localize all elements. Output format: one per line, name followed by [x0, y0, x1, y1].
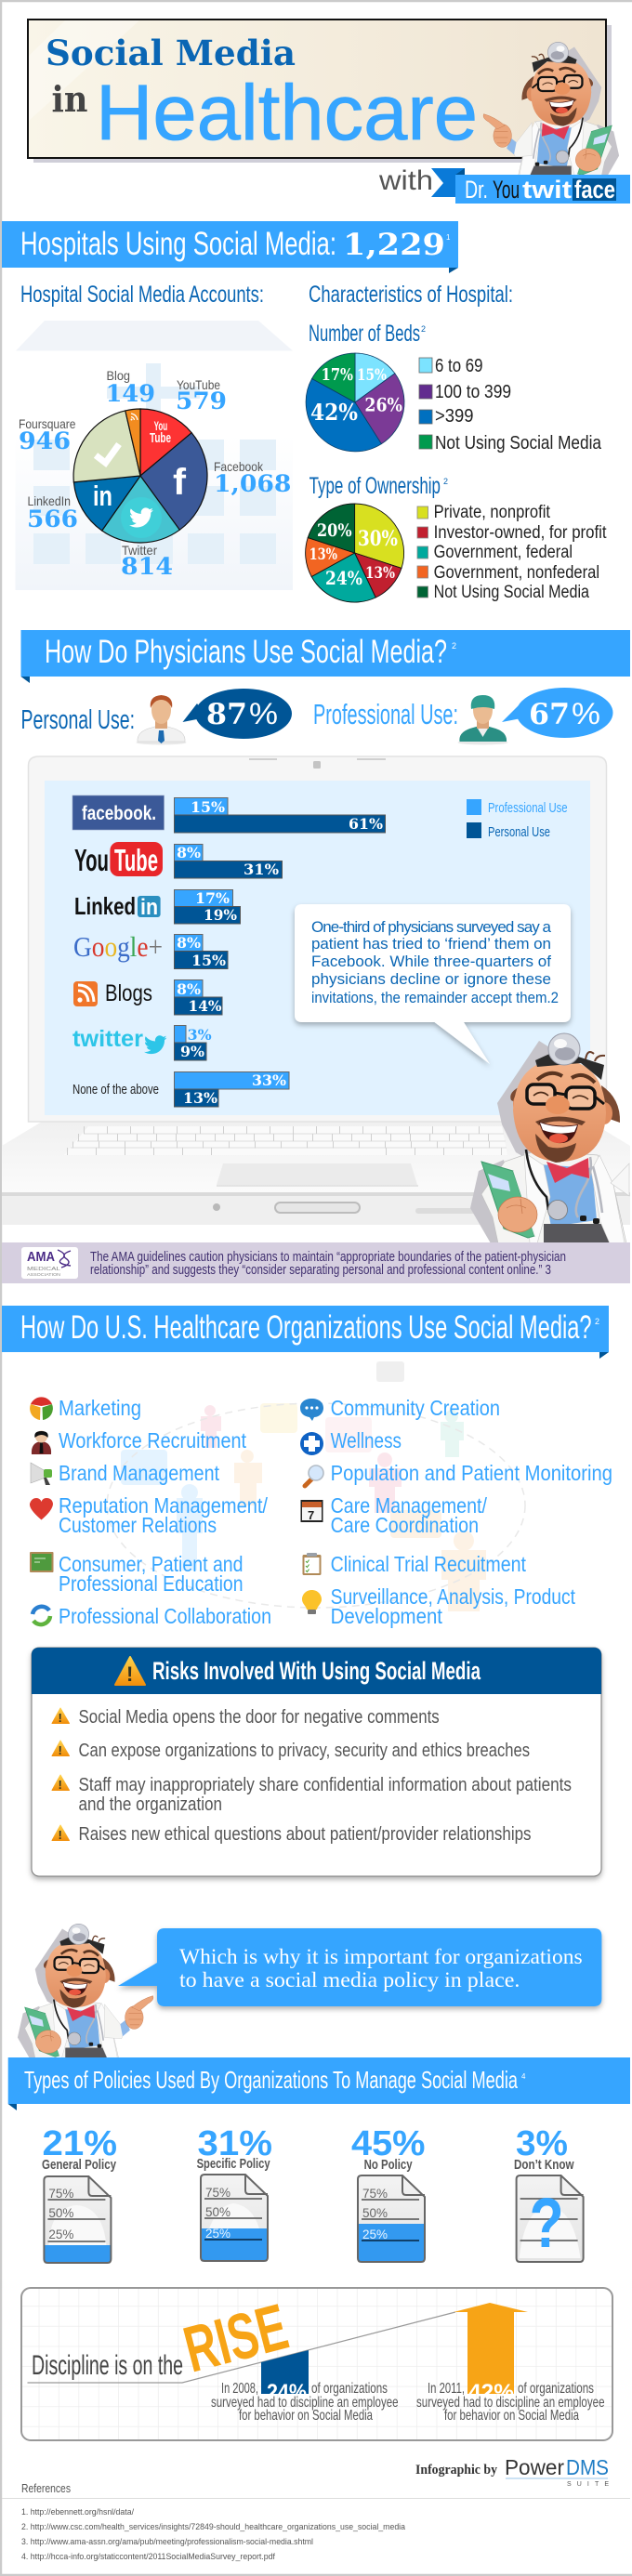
legend: type of ownership: [417, 503, 607, 602]
byline ribbon: face: [574, 176, 615, 204]
org use list: left column: Professional Collaboration: [59, 1604, 271, 1628]
org use list: left column: Workforce Recruitment: [59, 1428, 247, 1452]
banner: types of policies: [8, 2057, 630, 2110]
pie label: Facebook: 1,068: [214, 470, 292, 497]
heading: number of beds: Number of Beds: [309, 321, 420, 347]
banner: how do U.S. healthcare organizations use social media: 2: [595, 1317, 599, 1326]
document gauge: 31%: [201, 2175, 268, 2261]
org use list: right column: Surveillance, Analysis, Product: [331, 1584, 575, 1609]
text: 2008 stat: In 2008,: [221, 2381, 258, 2397]
doctor mascot: policy: [18, 1924, 153, 2060]
callout: friend requests: One-third of physicians surveyed say a: [311, 918, 552, 936]
heading: type of ownership: Type of Ownership: [309, 473, 441, 499]
professional use stat: %: [572, 697, 600, 730]
pie chart: type of ownership: 13%: [365, 564, 395, 583]
callout: friend requests: patient has tried to ‘friend’ them on: [311, 935, 551, 953]
row: facebook: 61%: [349, 815, 383, 833]
hospital building backdrop: [15, 321, 293, 590]
row: linkedin: 17%: [195, 889, 230, 907]
panel: risks: [32, 1648, 601, 1876]
row: youtube: You: [74, 843, 109, 877]
risk item 3: [52, 1775, 572, 1815]
pie label: Foursquare: Foursquare: [19, 416, 76, 431]
banner: hospitals using social media: Hospitals Using Social Media:: [20, 226, 336, 262]
banner: how do physicians use social media: [20, 630, 630, 683]
byline ribbon: You: [493, 176, 520, 204]
policy stat: no policy: 45%: [351, 2124, 426, 2163]
pie label: YouTube: 579: [176, 388, 227, 414]
bar chart: physician platform use: [72, 795, 385, 1107]
pie chart: type of ownership: 30%: [358, 527, 398, 551]
legend: type of ownership: Not Using Social Media: [434, 583, 589, 602]
personal use stat: 87: [206, 698, 247, 731]
icon: community bubble: [300, 1399, 323, 1421]
row: none of the above: None of the above: [72, 1082, 159, 1097]
pie label: Blog: Blog: [106, 368, 130, 383]
credit: infographic by PowerDMS: SUITE: [567, 2481, 609, 2488]
document gauge: 45%: 50%: [362, 2205, 388, 2220]
byline ribbon: with: [378, 165, 433, 196]
references: References: [21, 2481, 71, 2495]
banner: how do physicians use social media: 2: [452, 641, 456, 651]
row: google plus: [73, 930, 228, 969]
byline ribbon: Dr.: [465, 176, 488, 204]
trend line: [28, 2312, 455, 2383]
row: twitter: 3%: [188, 1026, 212, 1044]
org use list: right column: Care Coordination: [331, 1513, 479, 1537]
icon: collaboration arrows: [33, 1607, 50, 1624]
row: twitter: 9%: [180, 1043, 204, 1060]
legend: type of ownership: Investor-owned, for profit: [434, 523, 607, 543]
pie label: YouTube: YouTube: [177, 377, 220, 392]
pie chart: social media accounts: [73, 409, 207, 543]
word: RISE: RISE: [177, 2290, 295, 2386]
risk item 2: !: [58, 1743, 62, 1757]
text: 2011 stat: of organizations: [518, 2381, 594, 2397]
row: blogs: 14%: [188, 997, 221, 1015]
pie icons: in: [93, 480, 112, 512]
legend: type of ownership: Private, nonprofit: [434, 503, 551, 522]
row: blogs: 8%: [177, 980, 201, 998]
risk item 3: and the organization: [78, 1794, 222, 1815]
org use list: left column: Consumer, Patient and: [59, 1552, 244, 1576]
panel header: Risks Involved With Using Social Media: [152, 1657, 481, 1685]
row: google plus: Google+: [73, 930, 163, 963]
credit: infographic by PowerDMS: Infographic by: [415, 2463, 497, 2477]
pie label: Foursquare: [19, 416, 76, 454]
pie label: Foursquare: 946: [19, 427, 71, 454]
icon: marketing ball: [30, 1397, 53, 1420]
pie label: Twitter: Twitter: [122, 543, 157, 558]
text: 2008 stat: surveyed had to discipline an employee: [211, 2395, 399, 2411]
callout: friend requests: Facebook. While three-quarters of: [311, 953, 551, 970]
row: youtube: [74, 842, 283, 878]
icon: wellness plus: [300, 1432, 323, 1455]
bar: 2008: 24%: [267, 2380, 307, 2405]
document gauge: 21%: 50%: [48, 2205, 73, 2220]
pie chart: type of ownership: [306, 504, 404, 602]
document gauge: 21%: 75%: [48, 2186, 73, 2201]
references: 3. http://www.ama-assn.org/ama/pub/meeting/professionalism-social-media.shtml: [21, 2537, 313, 2547]
professional use stat: 67: [529, 698, 570, 731]
policy stat: specific: [197, 2124, 272, 2261]
title: Healthcare: Healthcare: [96, 69, 478, 156]
risk item 2: Can expose organizations to privacy, security and ethics breaches: [78, 1741, 530, 1761]
row: linkedin: in: [140, 895, 158, 920]
icon: light bulb: [302, 1590, 322, 1614]
callout: policy importance: to have a social media policy in place.: [179, 1968, 520, 1991]
row: blogs: Blogs: [105, 980, 152, 1006]
legend: number of beds: [419, 356, 602, 453]
row: linkedin: [74, 889, 240, 924]
legend: number of beds: >399: [435, 406, 474, 427]
callout: friend requests: [295, 904, 571, 1064]
document gauge: 21%: [44, 2176, 111, 2263]
row: twitter: [72, 1026, 212, 1060]
banner: how do U.S. healthcare organizations use social media: [2, 1306, 609, 1359]
org use list: right column: Development: [331, 1604, 443, 1628]
pie label: Twitter: [121, 543, 173, 580]
panel: discipline on the rise: [21, 2288, 612, 2440]
policy stat: specific: 31%: [197, 2124, 272, 2163]
byline ribbon: [378, 165, 630, 204]
icon: magnifier: [305, 1465, 323, 1486]
legend: type of ownership: Government, nonfederal: [434, 563, 599, 583]
AMA guideline strip: [2, 1242, 630, 1283]
professional use stat: Professional Use:: [313, 698, 458, 730]
icon: workforce person: [32, 1431, 51, 1454]
pie chart: number of beds: 17%: [322, 365, 353, 385]
org use list: left column: Professional Education: [59, 1571, 244, 1596]
banner: hospitals using social media: [2, 221, 458, 273]
org use list: right column: [331, 1396, 612, 1628]
bar chart legend: [467, 799, 568, 840]
heading: characteristics of hospital: Characteristics of Hospital:: [309, 282, 513, 308]
row: facebook: 15%: [191, 798, 225, 816]
pie chart: number of beds: 15%: [357, 366, 387, 385]
pie label: Blog: 149: [106, 380, 155, 407]
row: none of the above: 33%: [252, 1071, 286, 1089]
policy stat: general: General Policy: [42, 2157, 117, 2173]
document gauge: 45%: 75%: [362, 2186, 388, 2201]
pie label: Blog: [106, 368, 155, 407]
document gauge: 21%: 25%: [48, 2227, 73, 2241]
panel header: [32, 1648, 601, 1694]
pie icons: [93, 414, 187, 538]
legend: number of beds: 100 to 399: [435, 382, 511, 402]
icon: clipboard: [303, 1553, 322, 1575]
policy stat: general: 21%: [43, 2124, 117, 2163]
pie chart: number of beds: [306, 353, 404, 452]
org use list: left column: [59, 1396, 271, 1628]
pie chart: number of beds: 42%: [310, 399, 358, 426]
panel header: !: [126, 1663, 133, 1686]
policy stat: don't know: 3%: [516, 2124, 568, 2163]
credit: infographic by PowerDMS: Power: [505, 2455, 564, 2479]
document gauge: 31%: 75%: [205, 2185, 230, 2200]
risk item 3: !: [58, 1778, 62, 1792]
org use list: left column: Marketing: [59, 1396, 141, 1420]
pie chart: type of ownership: 13%: [309, 545, 337, 564]
bar: 2008: [261, 2350, 309, 2394]
references: [2, 2481, 630, 2562]
risk item 4: Raises new ethical questions about patient/provider relationships: [78, 1824, 532, 1845]
document gauge: 31%: 50%: [205, 2204, 230, 2219]
title: in: in: [52, 78, 87, 120]
row: linkedin: 19%: [204, 906, 237, 924]
org use list: left column: Brand Management: [59, 1461, 220, 1485]
pie label: Twitter: 814: [121, 553, 173, 580]
org use list: right column: Community Creation: [331, 1396, 500, 1420]
heading: discipline is on the: Discipline is on the: [32, 2350, 183, 2381]
policy stat: don't know: [514, 2124, 584, 2263]
pie chart: number of beds: 26%: [364, 394, 402, 416]
row: blogs: [73, 979, 222, 1015]
heading: number of beds: 2: [421, 324, 426, 334]
icon: physician: [136, 695, 186, 745]
document gauge: unknown: ?: [530, 2184, 564, 2263]
policy stat: specific: Specific Policy: [197, 2156, 270, 2172]
icon: megaphone: [31, 1463, 52, 1485]
bar chart legend: Personal Use: [488, 824, 550, 840]
row: linkedin: Linked: [74, 892, 136, 920]
banner: hospitals using social media: 1: [446, 233, 451, 242]
banner: types of policies: 4: [521, 2072, 526, 2081]
byline ribbon: twit: [522, 176, 572, 204]
row: twitter: twitter: [72, 1026, 143, 1052]
risk item 1: !: [58, 1711, 62, 1725]
policy stat: don't know: Don’t Know: [514, 2157, 574, 2173]
row: facebook: facebook.: [82, 803, 156, 824]
pie label: LinkedIn: 566: [27, 506, 78, 532]
policy stat: no policy: No Policy: [364, 2157, 413, 2173]
pie chart: type of ownership: 24%: [325, 567, 362, 589]
banner: hospitals using social media: 1,229: [343, 227, 445, 262]
row: google plus: 15%: [191, 952, 226, 969]
professional use stat: [313, 688, 613, 745]
arrow: 2011: 42%: [468, 2380, 514, 2405]
heading: number of beds: [309, 321, 426, 347]
heading: hospital social media accounts: Hospital Social Media Accounts:: [20, 282, 264, 308]
pie label: LinkedIn: LinkedIn: [28, 493, 71, 508]
text: 2008 stat: for behavior on Social Media: [239, 2408, 373, 2424]
pie label: Facebook: Facebook: [214, 459, 264, 474]
document gauge: 45%: 25%: [362, 2227, 388, 2241]
org use list: right column: Clinical Trial Recuitment: [331, 1552, 527, 1576]
AMA logo: AMA: [27, 1249, 55, 1265]
banner: how do physicians use social media: How Do Physicians Use Social Media?: [45, 634, 447, 670]
row: youtube: Tube: [114, 843, 158, 877]
AMA logo: MEDICAL: [27, 1267, 60, 1272]
document gauge: unknown: [517, 2175, 584, 2263]
callout: policy importance: [118, 1928, 601, 2006]
credit: infographic by PowerDMS: [415, 2455, 609, 2488]
heading: type of ownership: 2: [443, 477, 448, 486]
icon: chalkboard: [30, 1552, 54, 1572]
row: none of the above: [72, 1071, 289, 1107]
org use list: right column: Wellness: [331, 1428, 402, 1452]
text: 2011 stat: for behavior on Social Media: [444, 2408, 579, 2424]
references: 4. http://hcca-info.org/staticcontent/2011SocialMediaSurvey_report.pdf: [21, 2552, 275, 2562]
org use list: right column: Care Management/: [331, 1493, 488, 1518]
pie chart: type of ownership: 20%: [317, 520, 352, 541]
credit: infographic by PowerDMS: DMS: [566, 2455, 609, 2479]
legend: type of ownership: Government, federal: [434, 543, 573, 562]
pie label: YouTube: [176, 377, 227, 414]
references: 2. http://www.csc.com/health_services/insights/72849-should_healthcare_organizations_use_social_media: [21, 2522, 406, 2532]
text: 2008 stat: of organizations: [311, 2381, 388, 2397]
document gauge: 45%: [358, 2175, 425, 2262]
personal use stat: %: [249, 697, 278, 730]
icon: heart: [30, 1498, 53, 1520]
doctor mascot: laptop: [470, 1033, 629, 1243]
row: youtube: 31%: [244, 861, 279, 878]
row: none of the above: 13%: [183, 1089, 217, 1107]
title panel: [28, 20, 612, 163]
icon: surgeon: [457, 695, 507, 745]
doctor mascot: header: [483, 42, 619, 178]
row: youtube: 8%: [177, 844, 201, 861]
legend: number of beds: 6 to 69: [435, 356, 483, 376]
arrow: 2011: [454, 2303, 528, 2394]
personal use stat: [20, 689, 292, 745]
policy stat: general: [42, 2124, 117, 2263]
pie icons: You: [154, 418, 167, 433]
policy stat: no policy: [351, 2124, 426, 2262]
row: google plus: 8%: [177, 934, 201, 952]
pie label: Facebook: [214, 459, 292, 497]
text: 2008 stat: [211, 2381, 399, 2424]
callout: friend requests: invitations, the remainder accept them.2: [311, 989, 559, 1006]
document gauge: 31%: 25%: [205, 2226, 230, 2241]
callout: policy importance: Which is why it is important for organizations: [179, 1945, 583, 1968]
legend: number of beds: Not Using Social Media: [435, 433, 602, 453]
references: 1. http://ebennett.org/hsnl/data/: [21, 2507, 134, 2517]
faint network backdrop: [107, 1361, 525, 1611]
pie label: LinkedIn: [27, 493, 78, 532]
AMA logo: [21, 1247, 78, 1279]
org use list: left column: Customer Relations: [59, 1513, 217, 1537]
icon: calendar: [301, 1500, 323, 1522]
pie icons: f: [173, 462, 187, 503]
AMA logo: ASSOCIATION: [27, 1272, 60, 1277]
risk item 4: !: [58, 1828, 62, 1842]
callout: friend requests: physicians decline or ignore these: [311, 970, 551, 988]
org use list: left column: Reputation Management/: [59, 1493, 269, 1518]
text: 2011 stat: In 2011,: [428, 2381, 465, 2397]
title: Social Media: Social Media: [46, 33, 296, 73]
row: facebook: [72, 795, 385, 833]
personal use stat: Personal Use:: [20, 705, 135, 735]
risk item 1: Social Media opens the door for negative comments: [78, 1707, 440, 1728]
pie icons: Tube: [150, 430, 171, 446]
icon: calendar: 7: [308, 1508, 314, 1522]
text: 2011 stat: [416, 2381, 605, 2424]
bar chart legend: Professional Use: [488, 800, 568, 816]
laptop illustration: [2, 756, 630, 1225]
